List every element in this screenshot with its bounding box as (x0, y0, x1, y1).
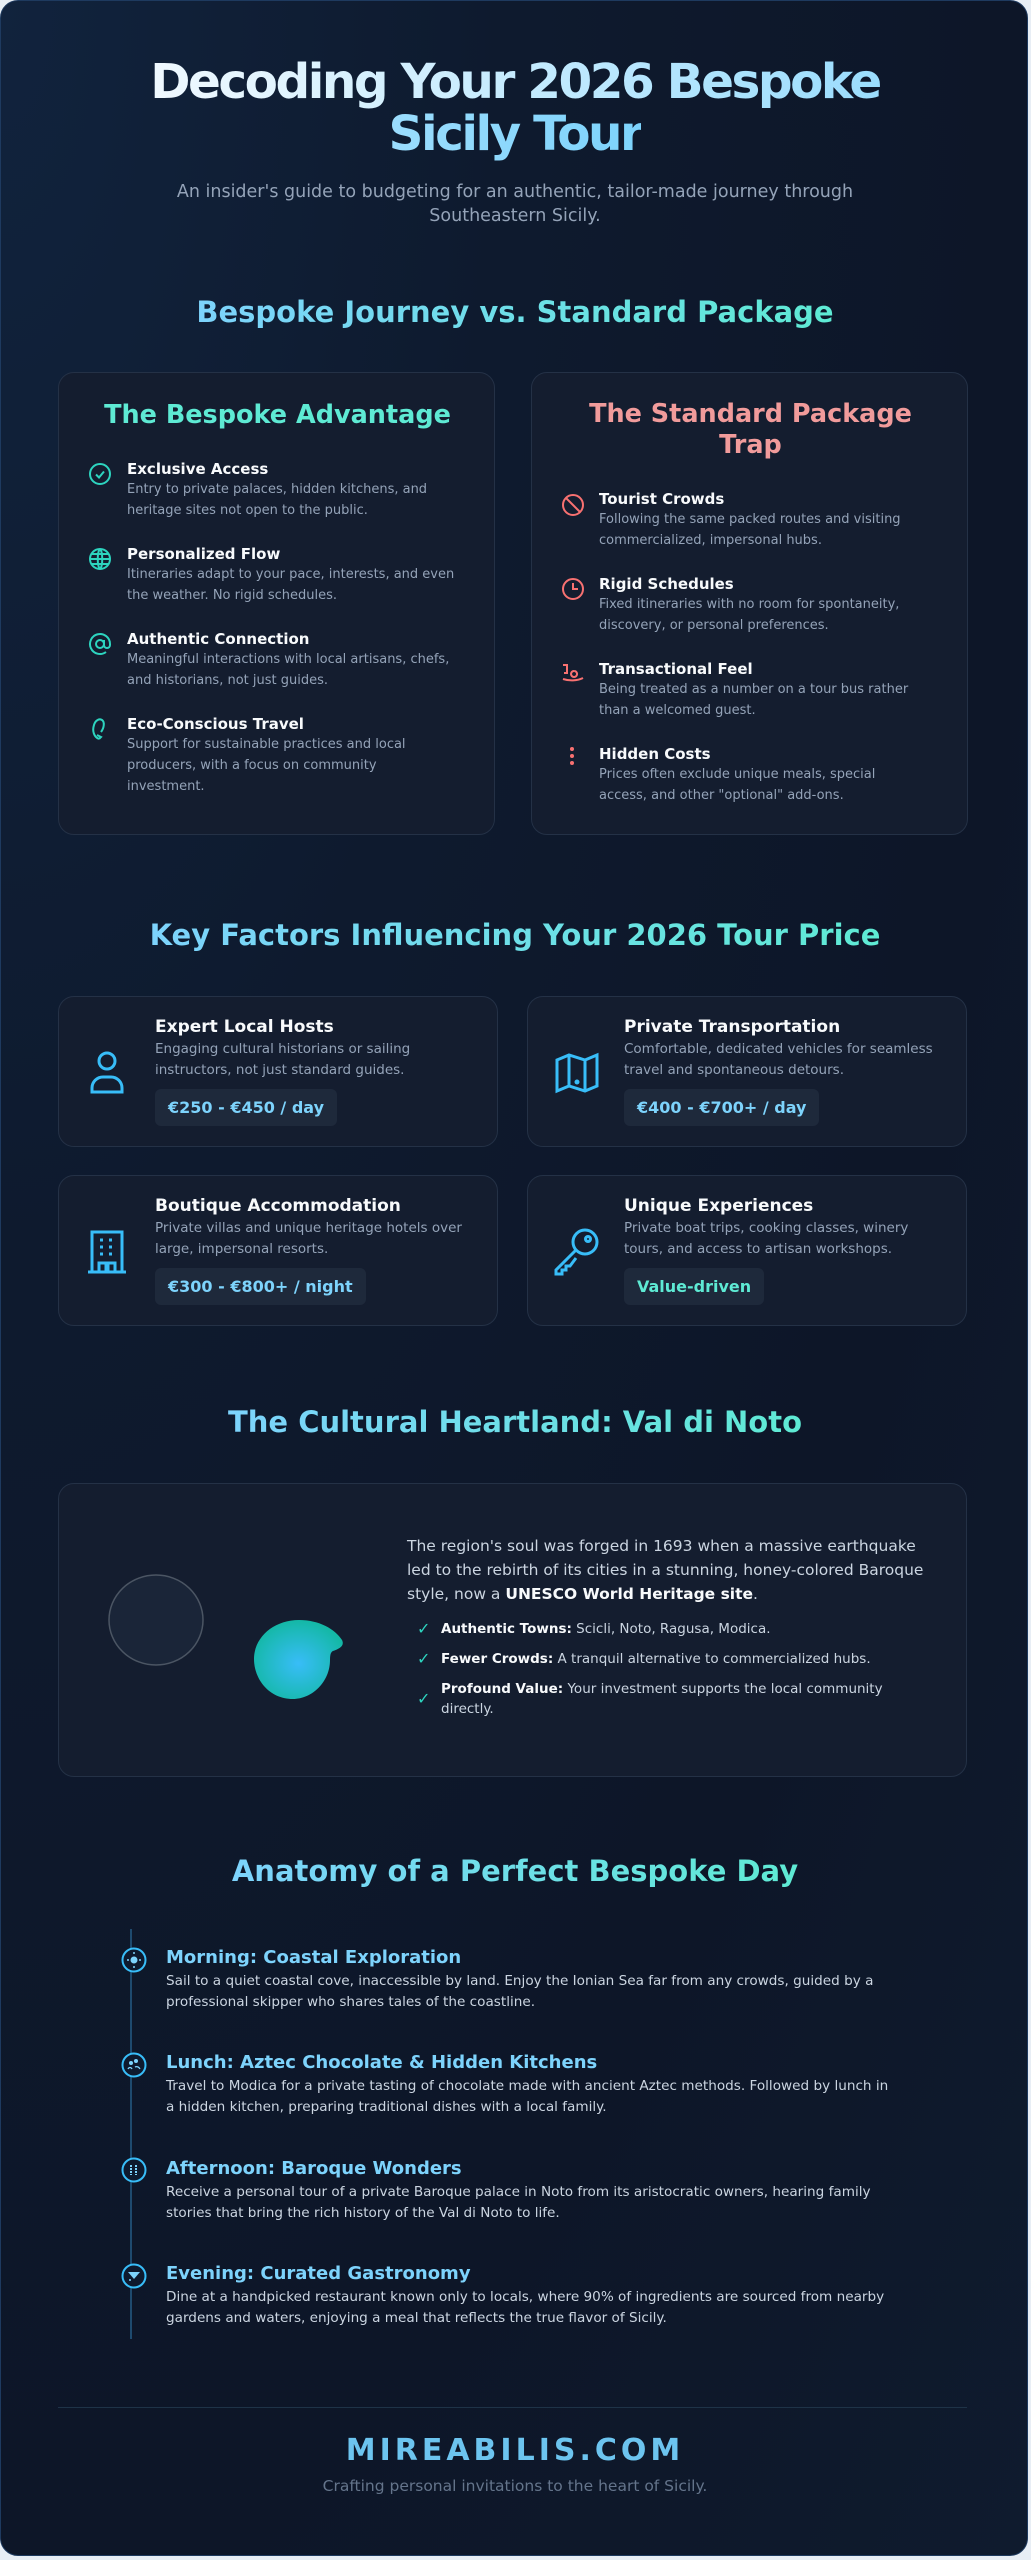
icon: clock (562, 578, 584, 600)
item: hidden costs: Prices often exclude unique meals, special access, and other "optional" add-ons. (599, 767, 875, 803)
text: boutique accommodation (155, 1196, 462, 1305)
text: unique experiences: Private boat trips, cooking classes, winery tours, and access to artisan workshops. (624, 1220, 908, 1257)
item: authentic connection: Meaningful interactions with local artisans, chefs, and historians, not just guides. (127, 652, 449, 688)
text: private transportation: Comfortable, dedicated vehicles for seamless travel and spontaneous detours. (624, 1041, 933, 1078)
item: exclusive access (127, 460, 427, 518)
list: highlights: ✓ (417, 1689, 430, 1708)
timeline item: lunch: Travel to Modica for a private tasting of chocolate made with ancient Aztec methods. Followed by lunch in a hidden kitchen, preparing traditional dishes with a local family. (166, 2078, 888, 2114)
list: highlights: Profound Value: Your investment supports the local community directly. (441, 1681, 883, 1717)
text: expert local hosts (155, 1017, 410, 1126)
list: highlights: ✓ (417, 1619, 430, 1638)
item: transactional feel (599, 660, 908, 718)
list: highlights: Authentic Towns: Scicli, Noto, Ragusa, Modica. (441, 1621, 771, 1637)
timeline item: evening (166, 2263, 896, 2328)
timeline item: lunch: Lunch: Aztec Chocolate & Hidden Kitchens (166, 2052, 597, 2073)
list: highlights: ✓ (417, 1649, 430, 1668)
item: exclusive access: Entry to private palaces, hidden kitchens, and heritage sites not open to the public. (127, 482, 427, 518)
card: unique experiences (527, 1175, 967, 1326)
panel: val di noto (58, 1483, 967, 1777)
item: exclusive access: Exclusive Access (127, 460, 268, 478)
heading: val di noto: The Cultural Heartland: Val di Noto (228, 1405, 802, 1439)
timeline item: lunch (166, 2052, 888, 2114)
item: rigid schedules (599, 575, 899, 633)
panel heading: The Standard Package (589, 399, 912, 429)
text: boutique accommodation: Boutique Accommodation (155, 1196, 401, 1216)
timeline item: evening: Evening: Curated Gastronomy (166, 2263, 471, 2284)
icon: person (90, 1052, 124, 1094)
text: expert local hosts: Engaging cultural historians or sailing instructors, not just standard guides. (155, 1041, 410, 1078)
timeline item: morning: Morning: Coastal Exploration (166, 1947, 461, 1968)
item: authentic connection: Authentic Connection (127, 630, 309, 648)
icon: building (88, 1230, 126, 1274)
item: authentic connection (127, 630, 449, 688)
icon: key (554, 1228, 598, 1276)
timeline item: morning (166, 1947, 873, 2010)
text: private transportation: Private Transportation (624, 1017, 840, 1037)
item: tourist crowds: Following the same packed routes and visiting commercialized, impersonal hubs. (599, 512, 901, 548)
item: eco-conscious: Eco-Conscious Travel (127, 715, 304, 733)
panel: standard package trap (531, 372, 968, 835)
icon: check (89, 463, 111, 485)
icon: glass (121, 2263, 147, 2289)
icon: at (88, 633, 111, 655)
text: unique experiences: Value-driven (637, 1277, 751, 1296)
footer: tagline: Crafting personal invitations to the heart of Sicily. (323, 2477, 707, 2495)
heading: comparison: Bespoke Journey vs. Standard Package (196, 295, 834, 329)
card: private transportation (527, 996, 967, 1147)
list: highlights: Fewer Crowds: A tranquil alternative to commercialized hubs. (441, 1651, 871, 1667)
icon: leaf (92, 718, 105, 740)
timeline item: afternoon: Afternoon: Baroque Wonders (166, 2158, 462, 2179)
item: tourist crowds: Tourist Crowds (599, 490, 724, 508)
text: description: The region's soul was forged in 1693 when a massive earthquake led to the rebirth of its cities in a stunning, honey-colored Baroque style, now a UNESCO World Heritage site. (407, 1537, 923, 1603)
item: eco-conscious: Support for sustainable practices and local producers, with a focus on community investment. (127, 737, 406, 794)
footer: brand: MIREABILIS.COM (346, 2433, 684, 2468)
heading: anatomy: Anatomy of a Perfect Bespoke Day (232, 1854, 798, 1888)
item: personalized flow: Itineraries adapt to your pace, interests, and even the weather. No rigid schedules. (127, 567, 454, 603)
item: hidden costs (599, 745, 875, 803)
item: hidden costs: Hidden Costs (599, 745, 711, 763)
list: highlights (417, 1619, 883, 1717)
icon: bus number (562, 664, 584, 682)
panel heading: Trap (719, 430, 782, 460)
panel: bespoke advantage (58, 372, 495, 835)
timeline item: evening: Dine at a handpicked restaurant known only to locals, where 90% of ingredients are sourced from nearby gardens and waters, enjoying a meal that reflects the true flavor of Sicily. (166, 2289, 884, 2326)
item: tourist crowds (599, 490, 901, 548)
item: rigid schedules: Fixed itineraries with no room for spontaneity, discovery, or personal preferences. (599, 597, 899, 633)
text: unique experiences (624, 1196, 908, 1305)
item: transactional feel: Transactional Feel (599, 660, 753, 678)
item: personalized flow (127, 545, 454, 603)
text: unique experiences: Unique Experiences (624, 1196, 813, 1216)
card: expert local hosts (58, 996, 498, 1147)
subtitle: An insider's guide to budgeting for an authentic, tailor-made journey through Southeastern Sicily. (177, 182, 853, 226)
text: boutique accommodation: €300 - €800+ / night (168, 1277, 353, 1296)
timeline (122, 1929, 888, 2339)
timeline item: afternoon: Receive a personal tour of a private Baroque palace in Noto from its aristocratic owners, hearing family stories that bring the rich history of the Val di Noto to life. (166, 2184, 871, 2220)
panel heading: The Bespoke Advantage (104, 400, 451, 430)
timeline item: afternoon (166, 2158, 871, 2220)
text: expert local hosts: €250 - €450 / day (168, 1098, 324, 1117)
timeline item: morning: Sail to a quiet coastal cove, inaccessible by land. Enjoy the Ionian Sea far from any crowds, guided by a professional skipper who shares tales of the coastline. (166, 1973, 873, 2010)
title: Sicily Tour (389, 106, 641, 162)
icon: sun (122, 1948, 146, 1972)
illustration: map shapes (108, 1574, 343, 1699)
item: personalized flow: Personalized Flow (127, 545, 280, 563)
icon: map (556, 1052, 598, 1094)
title (150, 54, 880, 162)
card: boutique accommodation (58, 1175, 498, 1326)
text: private transportation (624, 1017, 933, 1126)
icon: people (122, 2052, 146, 2078)
icon: ban (562, 494, 584, 516)
text: expert local hosts: Expert Local Hosts (155, 1017, 334, 1037)
heading: key factors: Key Factors Influencing Your 2026 Tour Price (150, 918, 880, 952)
panel heading (589, 399, 912, 460)
text: private transportation: €400 - €700+ / day (637, 1098, 806, 1117)
icon: globe (89, 548, 111, 570)
text: boutique accommodation: Private villas and unique heritage hotels over large, impersonal resorts. (155, 1220, 462, 1257)
item: transactional feel: Being treated as a number on a tour bus rather than a welcomed guest. (599, 682, 908, 718)
item: rigid schedules: Rigid Schedules (599, 575, 734, 593)
icon: columns (122, 2158, 146, 2182)
icon: dots (570, 747, 574, 765)
title: Decoding Your 2026 Bespoke (150, 54, 880, 110)
